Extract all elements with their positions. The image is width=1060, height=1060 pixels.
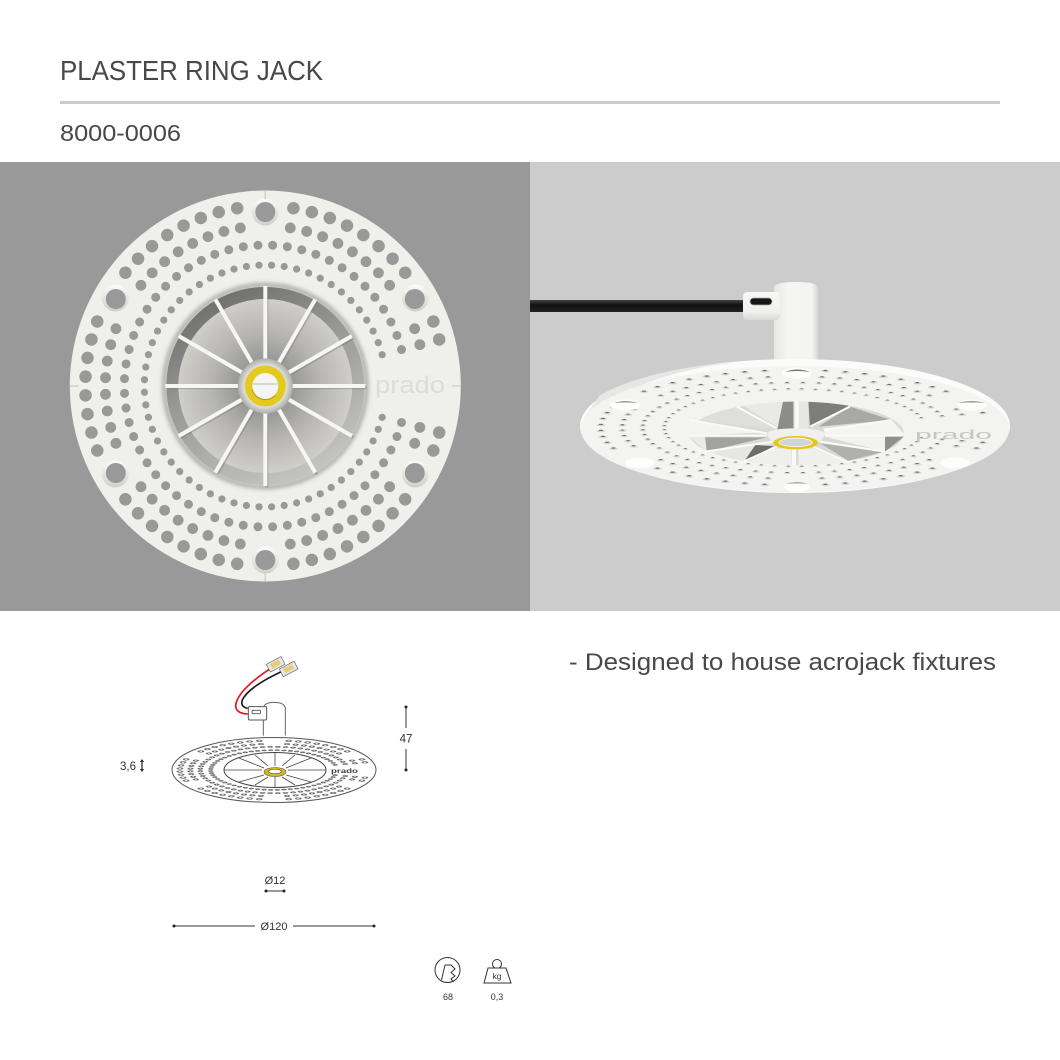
title: PLASTER RING JACK (60, 55, 323, 86)
central opening with spokes (164, 285, 367, 488)
brand mark: prado (375, 372, 445, 399)
icon: weight 0,3 kg (484, 960, 511, 1002)
dimension: diameter 120 (172, 921, 376, 933)
opening with spokes (688, 400, 905, 467)
opening and spokes (224, 752, 326, 788)
dimension: diameter 12 (264, 875, 286, 892)
panel: front view (0, 162, 530, 611)
panel: side view (530, 162, 1060, 611)
product code: 8000-0006 (60, 120, 181, 146)
dimension: height 47: 47 (400, 734, 412, 746)
icon: plaster hardness 68 (435, 958, 460, 1002)
central hub with yellow ring (238, 358, 293, 414)
icon: plaster hardness 68: 68 (443, 992, 453, 1002)
technical drawing (172, 657, 376, 802)
mounting holes (610, 368, 987, 492)
dimension: height 47 (400, 706, 412, 772)
wires and connectors (236, 657, 298, 736)
dimension: diameter 120: Ø120 (261, 921, 287, 933)
stem and cable boss (743, 282, 818, 360)
text: feature note: - Designed to house acrojack fixtures (569, 649, 996, 676)
perspective disc (580, 359, 1010, 493)
brand mark: prado (331, 768, 358, 774)
perforation rings (601, 370, 989, 486)
dimension: thickness 3,6 (120, 759, 144, 773)
disc outline (172, 738, 376, 802)
dimension: diameter 12: Ø12 (265, 875, 285, 887)
icon: weight 0,3 kg: kg (493, 971, 502, 981)
dimension: thickness 3,6: 3,6 (120, 761, 136, 773)
black cable (530, 300, 744, 312)
hub with yellow ring (767, 428, 825, 449)
icon: weight 0,3 kg: 0,3 (491, 992, 503, 1002)
perforation rings (85, 206, 445, 566)
mounting holes (102, 198, 429, 574)
brand mark: prado (915, 428, 992, 442)
